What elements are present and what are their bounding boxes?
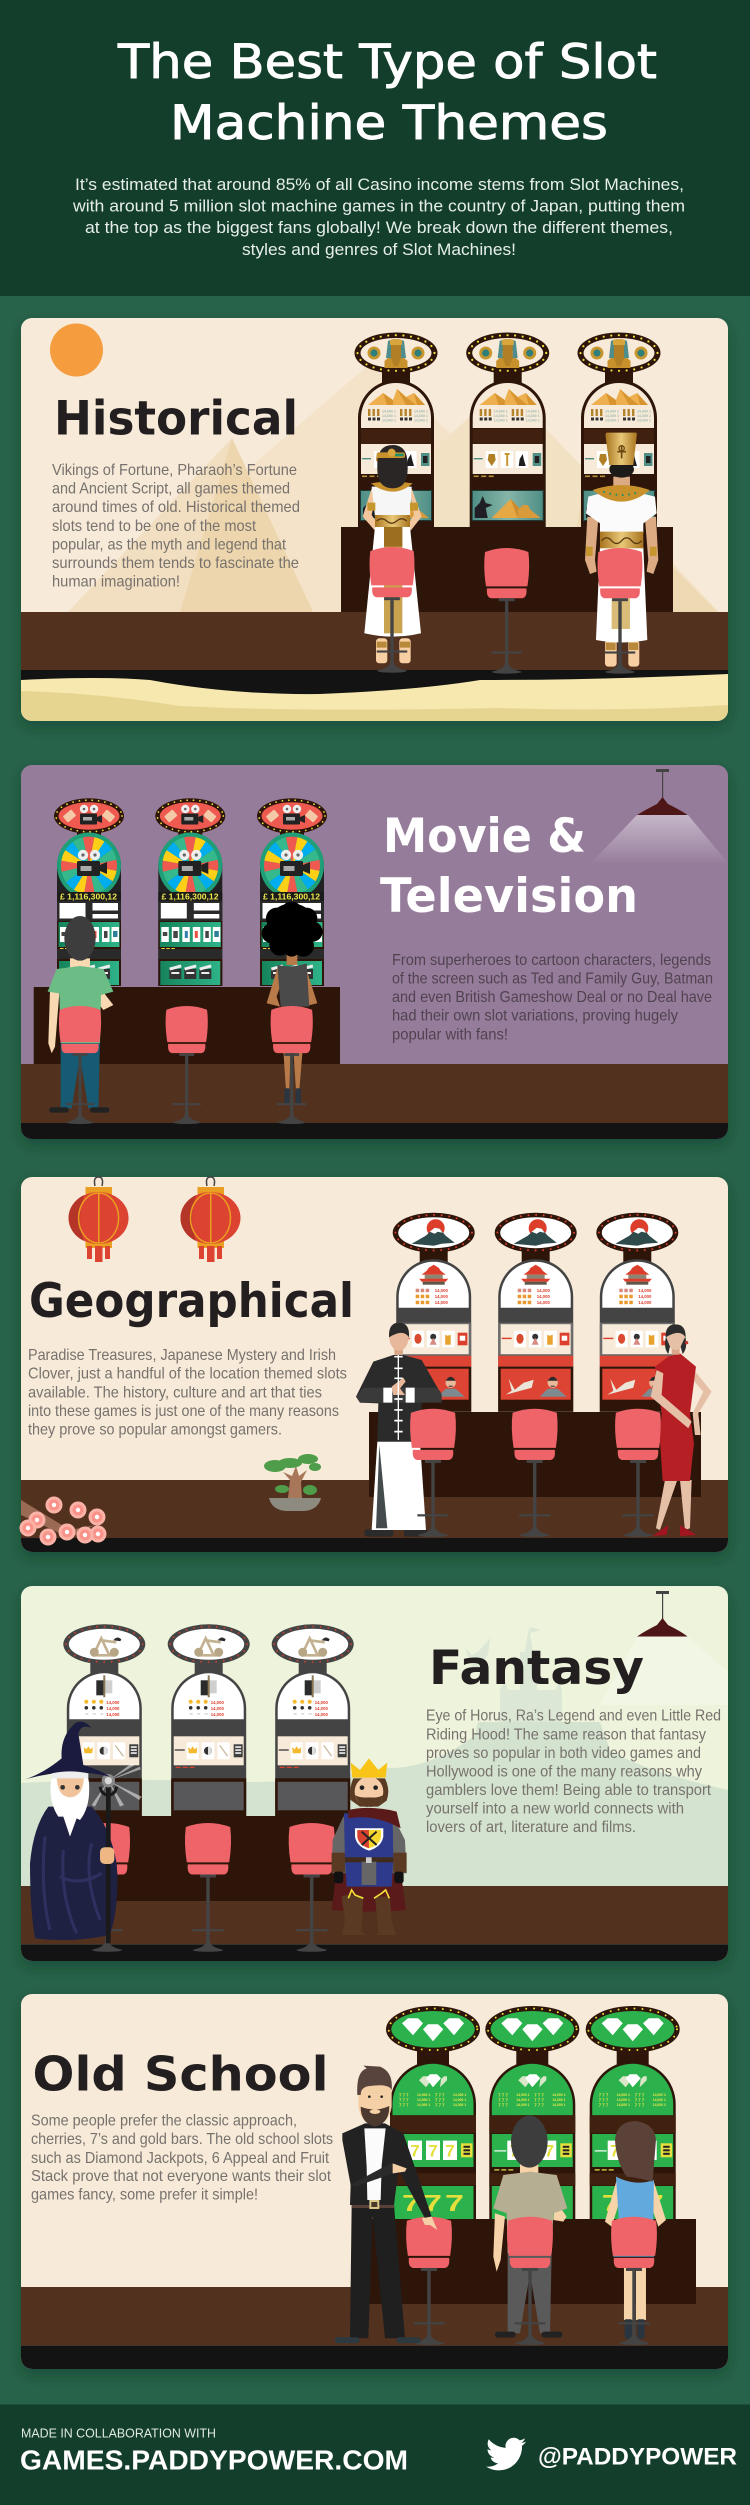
scene: floor [21, 1480, 728, 1552]
icon: cherry blossom branch [20, 1496, 106, 1546]
text: geographical description: they prove so popular amongst gamers. [28, 1422, 282, 1439]
scene: pyramids, floor and sand [21, 362, 728, 721]
text: old school description: cherries, 7’s and gold bars. The old school slots [31, 2131, 333, 2148]
text: geographical description: into these games is just one of the many reasons [28, 1403, 339, 1420]
text: geographical description [28, 1347, 347, 1439]
text: fantasy description [426, 1708, 721, 1836]
counter [34, 987, 340, 1064]
icon: bonsai tree [264, 1454, 321, 1511]
heading: movie and television: Television [380, 869, 638, 924]
slot machines: movie: £ 1,116,300,12 [263, 892, 321, 902]
stools [410, 1409, 661, 1537]
counter [341, 527, 673, 612]
icon: ceiling lamp [637, 769, 688, 815]
footer band [0, 2404, 750, 2505]
person: woman in red dress [651, 1324, 712, 1536]
person: bearded man in black [335, 2066, 437, 2343]
text: historical description: human imagination! [52, 574, 180, 591]
heading: fantasy: Fantasy [429, 1641, 644, 1696]
slot machines: movie: £ 1,116,300,12 [60, 892, 118, 902]
text: movie description: popular with fans! [392, 1026, 508, 1043]
text: old school description [31, 2113, 333, 2204]
icon: twitter bird [486, 2438, 526, 2470]
text: historical description: popular, as the myth and legend that [52, 536, 286, 553]
heading: movie and television [380, 809, 638, 924]
text: movie description: and even British Gameshow Deal or no Deal have [392, 989, 712, 1006]
person: woman in blue top [605, 2121, 666, 2339]
text: movie description: of the screen such as Ted and Family Guy, Batman [392, 970, 713, 987]
intro paragraph: styles and genres of Slot Machines! [242, 240, 516, 259]
intro paragraph [72, 175, 685, 259]
slot machines: fantasy [63, 1624, 354, 1816]
icon: orange sun [50, 324, 103, 376]
counter [60, 1816, 370, 1901]
text: old school description: Stack prove that not everyone wants their slot [31, 2168, 332, 2185]
slot machines: movie: £ 1,116,300,12 [162, 892, 219, 902]
text: fantasy description: yourself into a new world connects with [426, 1801, 684, 1818]
text: movie description [392, 952, 713, 1043]
counter [364, 2219, 696, 2304]
slot machines: egyptian [354, 332, 660, 527]
person: woman with afro [262, 902, 323, 1105]
person: man in tan shirt [493, 2116, 567, 2338]
text: fantasy description: gamblers love them! Being able to transport [426, 1782, 712, 1799]
person: man in green shirt [48, 916, 113, 1113]
intro paragraph: with around 5 million slot machine games in the country of Japan, putting them [72, 196, 685, 216]
title: Machine Themes [170, 96, 608, 151]
text: fantasy description: Hollywood is one of the many reasons why [426, 1764, 702, 1781]
header band [0, 0, 750, 296]
panel: movie and television [21, 765, 728, 1139]
scene: floor [21, 2287, 728, 2370]
text: geographical description: Clover, just a handful of the location themed slots [28, 1366, 347, 1383]
heading: historical: Historical [54, 392, 298, 446]
text: fantasy description: proves so popular in both video games and [426, 1745, 701, 1762]
person: egyptian woman [363, 445, 422, 663]
text: old school description: Some people prefer the classic approach, [31, 2113, 297, 2130]
text: collaboration credit [20, 2426, 408, 2476]
text: fantasy description: Riding Hood! The same reason that fantasy [426, 1726, 706, 1743]
text: geographical description: available. The history, culture and art that ties [28, 1384, 322, 1401]
text: fantasy description: Eye of Horus, Ra’s Legend and even Little Red [426, 1708, 721, 1725]
heading: old school: Old School [32, 2048, 328, 2102]
text: collaboration credit: MADE IN COLLABORATION WITH [21, 2426, 216, 2440]
icon: ceiling lamp [637, 1591, 688, 1636]
person: wizard [25, 1722, 142, 1943]
text: historical description: and Ancient Script, all games themed [52, 481, 290, 498]
text: old school description: such as Diamond Jackpots, 6 Appeal and Fruit [31, 2150, 329, 2167]
title: The Best Type of Slot [117, 35, 657, 90]
slot machines: movie [54, 798, 327, 986]
icon: paper lantern [69, 1177, 129, 1262]
panel: fantasy [21, 1586, 728, 1961]
stools [59, 1006, 313, 1124]
text: movie description: From superheroes to cartoon characters, legends [392, 952, 711, 969]
text: historical description [52, 462, 300, 591]
text: collaboration credit: GAMES.PADDYPOWER.COM [20, 2444, 408, 2476]
stools [84, 1823, 335, 1952]
text: geographical description: Paradise Treasures, Japanese Mystery and Irish [28, 1347, 336, 1364]
scene: floor [21, 815, 728, 1139]
panel: historical [21, 318, 728, 721]
text: twitter handle: @PADDYPOWER [538, 2444, 737, 2470]
text: fantasy description: lovers of art, literature and films. [426, 1819, 636, 1836]
icon: paper lantern [180, 1177, 240, 1262]
heading: geographical: Geographical [29, 1274, 354, 1329]
text: historical description: surrounds them tends to fascinate the [52, 555, 299, 572]
text: historical description: slots tend to be one of the most [52, 518, 257, 535]
person: man in black tunic [356, 1323, 442, 1537]
person: king [332, 1758, 407, 1935]
heading: movie and television: Movie & [383, 809, 586, 864]
slot machines: japanese [393, 1213, 678, 1412]
panel: geographical [20, 1177, 728, 1552]
text: historical description: Vikings of Fortune, Pharaoh’s Fortune [52, 462, 297, 479]
title [117, 35, 657, 151]
intro paragraph: It’s estimated that around 85% of all Casino income stems from Slot Machines, [75, 175, 684, 194]
text: movie description: had their own slot variations, proving hugely [392, 1008, 678, 1025]
stools [370, 547, 642, 674]
counter [369, 1412, 701, 1497]
slot machines: old school [386, 2006, 680, 2219]
intro paragraph: at the top as the biggest fans globally! We break down the different themes, [85, 218, 673, 237]
person: egyptian man [585, 433, 658, 667]
scene: hills, castle and floor [21, 1627, 728, 1961]
text: historical description: around times of old. Historical themed [52, 499, 300, 516]
text: old school description: games fancy, some prefer it simple! [31, 2187, 258, 2204]
panel: old school [21, 1994, 728, 2370]
stools [406, 2217, 657, 2345]
